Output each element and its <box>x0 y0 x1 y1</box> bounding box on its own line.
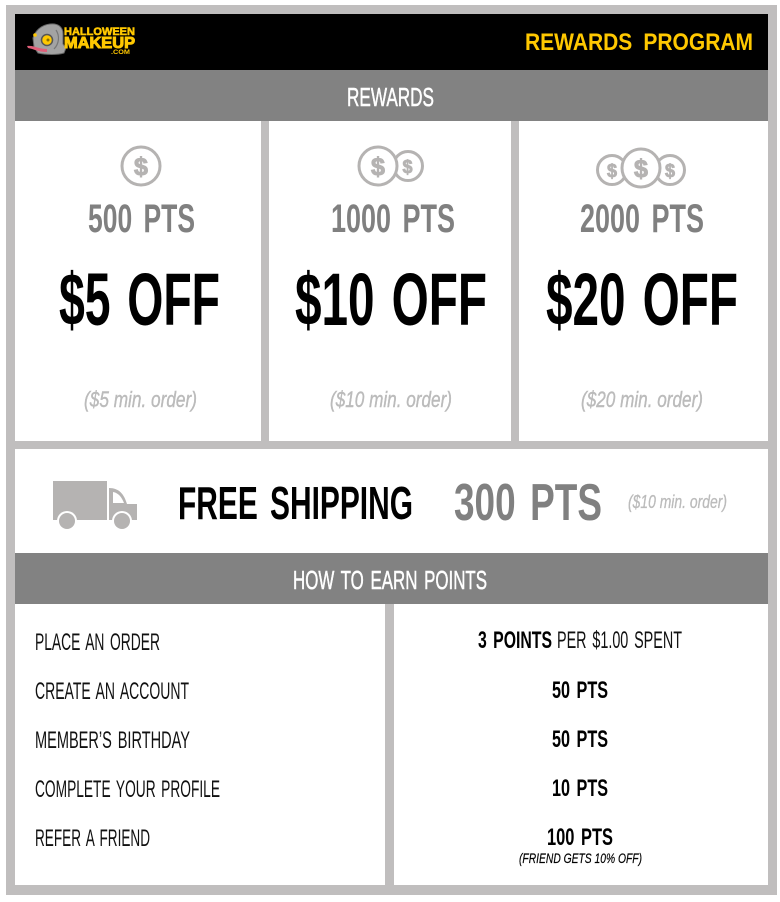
panel: 2000 points reward <box>519 121 768 441</box>
section bar: how to earn points <box>15 553 768 604</box>
panel: earning actions: MEMBER’S BIRTHDAY <box>35 727 190 754</box>
panel: 1000 points reward <box>269 121 511 441</box>
free shipping label: FREE SHIPPING <box>178 477 413 529</box>
icon: two coins <box>359 147 422 185</box>
minimum order: ($5 min. order) <box>84 387 197 412</box>
icon: zombie logo <box>27 24 135 56</box>
panel: earning actions: COMPLETE YOUR PROFILE <box>35 776 220 803</box>
panel: earning actions: REFER A FRIEND <box>35 825 150 852</box>
panel: points earned: 100 PTS <box>547 824 613 851</box>
icon: three coins <box>598 149 684 187</box>
panel: points earned: 50 PTS <box>552 726 608 753</box>
panel: points earned: (FRIEND GETS 10% OFF) <box>519 850 642 866</box>
points label: 500 PTS <box>88 197 195 241</box>
icon: three coins: $ <box>634 155 648 183</box>
shipping points: 300 PTS <box>454 474 602 532</box>
panel: earning actions: CREATE AN ACCOUNT <box>35 678 189 705</box>
icon: delivery truck <box>53 481 137 531</box>
panel: points earned <box>394 604 768 885</box>
panel: points earned: PER $1.00 SPENT <box>557 627 682 654</box>
panel: earning actions: PLACE AN ORDER <box>35 629 160 656</box>
panel: points earned: 50 PTS <box>552 677 608 704</box>
points label: 2000 PTS <box>580 197 704 241</box>
panel: earning actions <box>15 604 385 885</box>
panel: points earned: 10 PTS <box>552 775 608 802</box>
icon: three coins: $ <box>665 161 675 181</box>
icon: three coins: $ <box>607 161 617 181</box>
panel: points earned: 3 POINTS <box>478 627 552 654</box>
icon: two coins: $ <box>371 153 385 181</box>
header bar <box>15 14 768 70</box>
points label: 1000 PTS <box>331 197 455 241</box>
icon: zombie logo: HALLOWEEN <box>64 26 135 38</box>
minimum order: ($20 min. order) <box>581 387 703 412</box>
section bar: rewards: REWARDS <box>347 82 434 112</box>
icon: two coins: $ <box>402 157 413 177</box>
icon: zombie logo: MAKEUP <box>64 35 135 52</box>
icon: zombie logo: .COM <box>111 50 130 56</box>
shipping minimum order: ($10 min. order) <box>628 492 727 512</box>
minimum order: ($10 min. order) <box>330 387 452 412</box>
panel: free shipping <box>15 449 768 553</box>
section bar: how to earn points: HOW TO EARN POINTS <box>293 565 487 595</box>
discount: $10 OFF <box>295 258 487 341</box>
discount: $5 OFF <box>59 258 220 341</box>
section bar: rewards <box>15 70 768 121</box>
header title: REWARDS PROGRAM <box>525 29 753 56</box>
icon: one coin <box>122 147 160 185</box>
panel: 500 points reward <box>15 121 261 441</box>
icon: one coin: $ <box>134 153 148 181</box>
